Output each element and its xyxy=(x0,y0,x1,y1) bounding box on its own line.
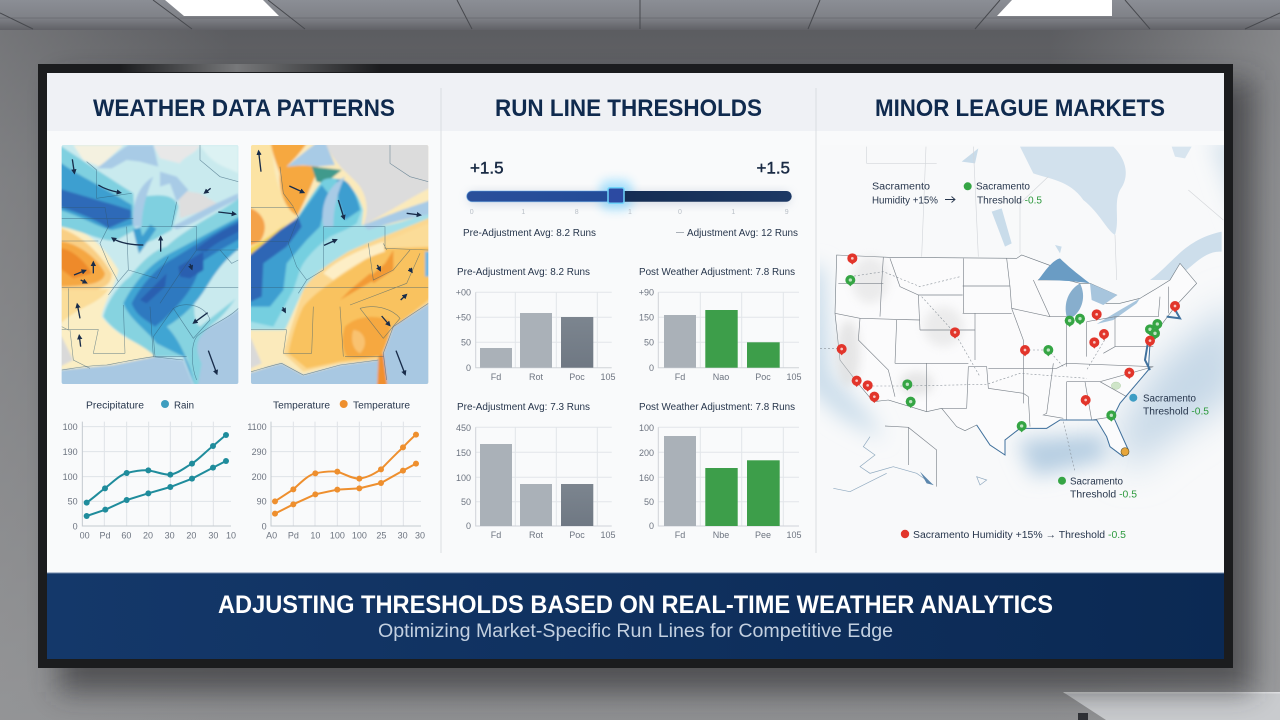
banner subtitle: Optimizing Market-Specific Run Lines for Competitive Edge xyxy=(378,621,893,642)
map: temperature xyxy=(251,145,428,384)
bar chart: post weather bottom: Pee xyxy=(755,530,771,540)
slider caption right: Adjustment Avg: 12 Runs xyxy=(687,228,798,239)
callout: sacramento humidity top: Sacramento xyxy=(872,182,930,192)
ceiling with light panels xyxy=(0,0,1280,30)
bar chart: post weather bottom: 160 xyxy=(639,473,654,483)
column dividers xyxy=(441,88,816,553)
line chart: precipitation: 50 xyxy=(68,497,78,507)
line chart: precipitation xyxy=(63,422,236,541)
bar chart: pre-adjustment top: Poc xyxy=(569,372,585,382)
bar chart: pre-adjustment top: 50 xyxy=(461,338,471,348)
line chart: temperature: 25 xyxy=(376,531,386,541)
panel: weather data patterns xyxy=(53,95,437,541)
slider: 1 xyxy=(521,209,525,216)
line chart: temperature: 290 xyxy=(252,447,267,457)
bar chart: post weather top: Fd xyxy=(675,372,685,382)
display frame xyxy=(38,64,1233,668)
bar chart: post weather top: Nao xyxy=(713,372,729,382)
line chart: precipitation: 20 xyxy=(143,531,153,541)
slider: 0 xyxy=(678,209,682,216)
bar chart: pre-adjustment top: +50 xyxy=(456,312,471,322)
line chart: temperature: A0 xyxy=(266,531,277,541)
panel: run line thresholds xyxy=(456,95,802,540)
line chart: precipitation: 30 xyxy=(208,531,218,541)
callout: sacramento humidity top xyxy=(872,182,955,206)
line chart: precipitation: 20 xyxy=(186,531,196,541)
bar chart: pre-adjustment bottom xyxy=(456,402,616,540)
line chart: temperature: 30 xyxy=(398,531,408,541)
panel: minor league markets xyxy=(820,99,1224,540)
bar chart: post weather bottom xyxy=(639,402,802,540)
bar chart: pre-adjustment top xyxy=(456,267,616,382)
callout: sacramento threshold east: Sacramento xyxy=(1143,394,1196,404)
bar chart: post weather bottom: Nbe xyxy=(713,530,729,540)
bar chart: pre-adjustment bottom: Poc xyxy=(569,530,585,540)
bar chart: pre-adjustment bottom: 50 xyxy=(461,497,471,507)
bar chart: post weather top: +90 xyxy=(639,288,654,298)
line chart: temperature: 200 xyxy=(252,472,267,482)
bar chart: pre-adjustment bottom: 100 xyxy=(456,473,471,483)
map legend: Sacramento Humidity +15% → Threshold -0.5 xyxy=(913,530,1126,541)
callout: sacramento threshold gulf: Threshold -0.5 xyxy=(1070,490,1137,500)
callout: sacramento threshold east xyxy=(1129,394,1209,418)
line chart: precipitation: 190 xyxy=(63,447,78,457)
header band xyxy=(47,73,1224,131)
heading: run line thresholds: RUN LINE THRESHOLDS xyxy=(495,95,762,122)
bar chart: post weather bottom: Fd xyxy=(675,530,685,540)
threshold value left: +1.5 xyxy=(470,158,504,178)
callout: sacramento humidity top: Humidity +15% xyxy=(872,196,938,206)
slider: 8 xyxy=(575,209,579,216)
desk corner xyxy=(1063,692,1280,720)
footer banner xyxy=(47,573,1224,659)
bar chart: pre-adjustment top: 105 xyxy=(600,372,616,382)
bar chart: post weather bottom: Post Weather Adjustment: 7.8 Runs xyxy=(639,402,795,413)
bar chart: pre-adjustment bottom: Fd xyxy=(491,530,501,540)
slider caption left: Pre-Adjustment Avg: 8.2 Runs xyxy=(463,228,596,239)
slider: 0 xyxy=(470,209,474,216)
line chart: temperature: 90 xyxy=(257,497,267,507)
bar chart: pre-adjustment bottom: 105 xyxy=(600,530,616,540)
bar chart: post weather bottom: 200 xyxy=(639,448,654,458)
bar chart: post weather top xyxy=(639,267,802,382)
legend: precipitation: Rain xyxy=(174,400,194,412)
bar chart: post weather top: Poc xyxy=(755,372,771,382)
bar chart: pre-adjustment bottom: Rot xyxy=(529,530,543,540)
legend: temperature: Temperature xyxy=(353,400,410,412)
line chart: precipitation: 0 xyxy=(73,521,78,531)
bar chart: post weather bottom: 50 xyxy=(644,497,654,507)
line chart: precipitation: Pd xyxy=(99,531,110,541)
slider xyxy=(467,180,792,216)
legend: precipitation: Precipitature xyxy=(86,400,144,412)
bar chart: pre-adjustment top: +00 xyxy=(456,288,471,298)
banner title: ADJUSTING THRESHOLDS BASED ON REAL-TIME WEATHER ANALYTICS xyxy=(218,591,1053,619)
callout: sacramento threshold top: Sacramento xyxy=(976,182,1030,192)
bar chart: post weather top: 50 xyxy=(644,338,654,348)
line chart: precipitation: 10 xyxy=(226,531,236,541)
line chart: temperature xyxy=(247,422,425,541)
threshold value right: +1.5 xyxy=(756,158,790,178)
bar chart: pre-adjustment bottom: 450 xyxy=(456,423,471,433)
bar chart: post weather top: 0 xyxy=(649,363,654,373)
bar chart: post weather bottom: 100 xyxy=(639,423,654,433)
bar chart: pre-adjustment bottom: Pre-Adjustment Avg: 7.3 Runs xyxy=(457,402,590,413)
callout: sacramento threshold top: Threshold -0.5 xyxy=(977,196,1042,206)
heading: minor league markets: MINOR LEAGUE MARKETS xyxy=(875,95,1165,122)
line chart: precipitation: 30 xyxy=(165,531,175,541)
bar chart: pre-adjustment bottom: 150 xyxy=(456,448,471,458)
legend: temperature xyxy=(273,400,410,412)
bar chart: pre-adjustment top: Rot xyxy=(529,372,543,382)
bar chart: pre-adjustment top: Pre-Adjustment Avg: 8.2 Runs xyxy=(457,267,590,278)
legend: precipitation xyxy=(86,400,194,412)
bar chart: post weather bottom: 105 xyxy=(786,530,802,540)
slider: 9 xyxy=(785,209,789,216)
line chart: precipitation: 00 xyxy=(80,531,90,541)
bar chart: post weather top: 150 xyxy=(639,312,654,322)
bar chart: pre-adjustment top: 0 xyxy=(466,363,471,373)
display shadow xyxy=(58,80,1253,692)
line chart: precipitation: 100 xyxy=(63,472,78,482)
bar chart: pre-adjustment top: Fd xyxy=(491,372,501,382)
callout: sacramento threshold gulf: Sacramento xyxy=(1070,476,1123,488)
slider: 1 xyxy=(731,209,735,216)
callout: sacramento threshold gulf xyxy=(1058,476,1137,500)
line chart: temperature: Pd xyxy=(288,531,299,541)
slider: 1 xyxy=(628,209,632,216)
bar chart: post weather bottom: 0 xyxy=(649,521,654,531)
line chart: precipitation: 100 xyxy=(63,422,78,432)
map: precipitation xyxy=(62,145,238,384)
bar chart: pre-adjustment bottom: 0 xyxy=(466,521,471,531)
bar chart: post weather top: 105 xyxy=(786,372,802,382)
callout: sacramento threshold east: Threshold -0.5 xyxy=(1143,406,1209,418)
line chart: temperature: 1100 xyxy=(247,422,267,432)
heading: weather data patterns: WEATHER DATA PATTERNS xyxy=(93,95,395,122)
display screen xyxy=(47,73,1224,573)
line chart: temperature: 0 xyxy=(262,521,267,531)
map: us market locations xyxy=(820,145,1224,492)
line chart: temperature: 100 xyxy=(330,531,345,541)
line chart: temperature: 10 xyxy=(310,531,320,541)
line chart: temperature: 30 xyxy=(415,531,425,541)
line chart: precipitation: 60 xyxy=(121,531,131,541)
bar chart: post weather top: Post Weather Adjustment: 7.8 Runs xyxy=(639,267,795,278)
line chart: temperature: 100 xyxy=(352,531,367,541)
callout: sacramento threshold top xyxy=(964,182,1042,206)
legend: temperature: Temperature xyxy=(273,400,330,412)
